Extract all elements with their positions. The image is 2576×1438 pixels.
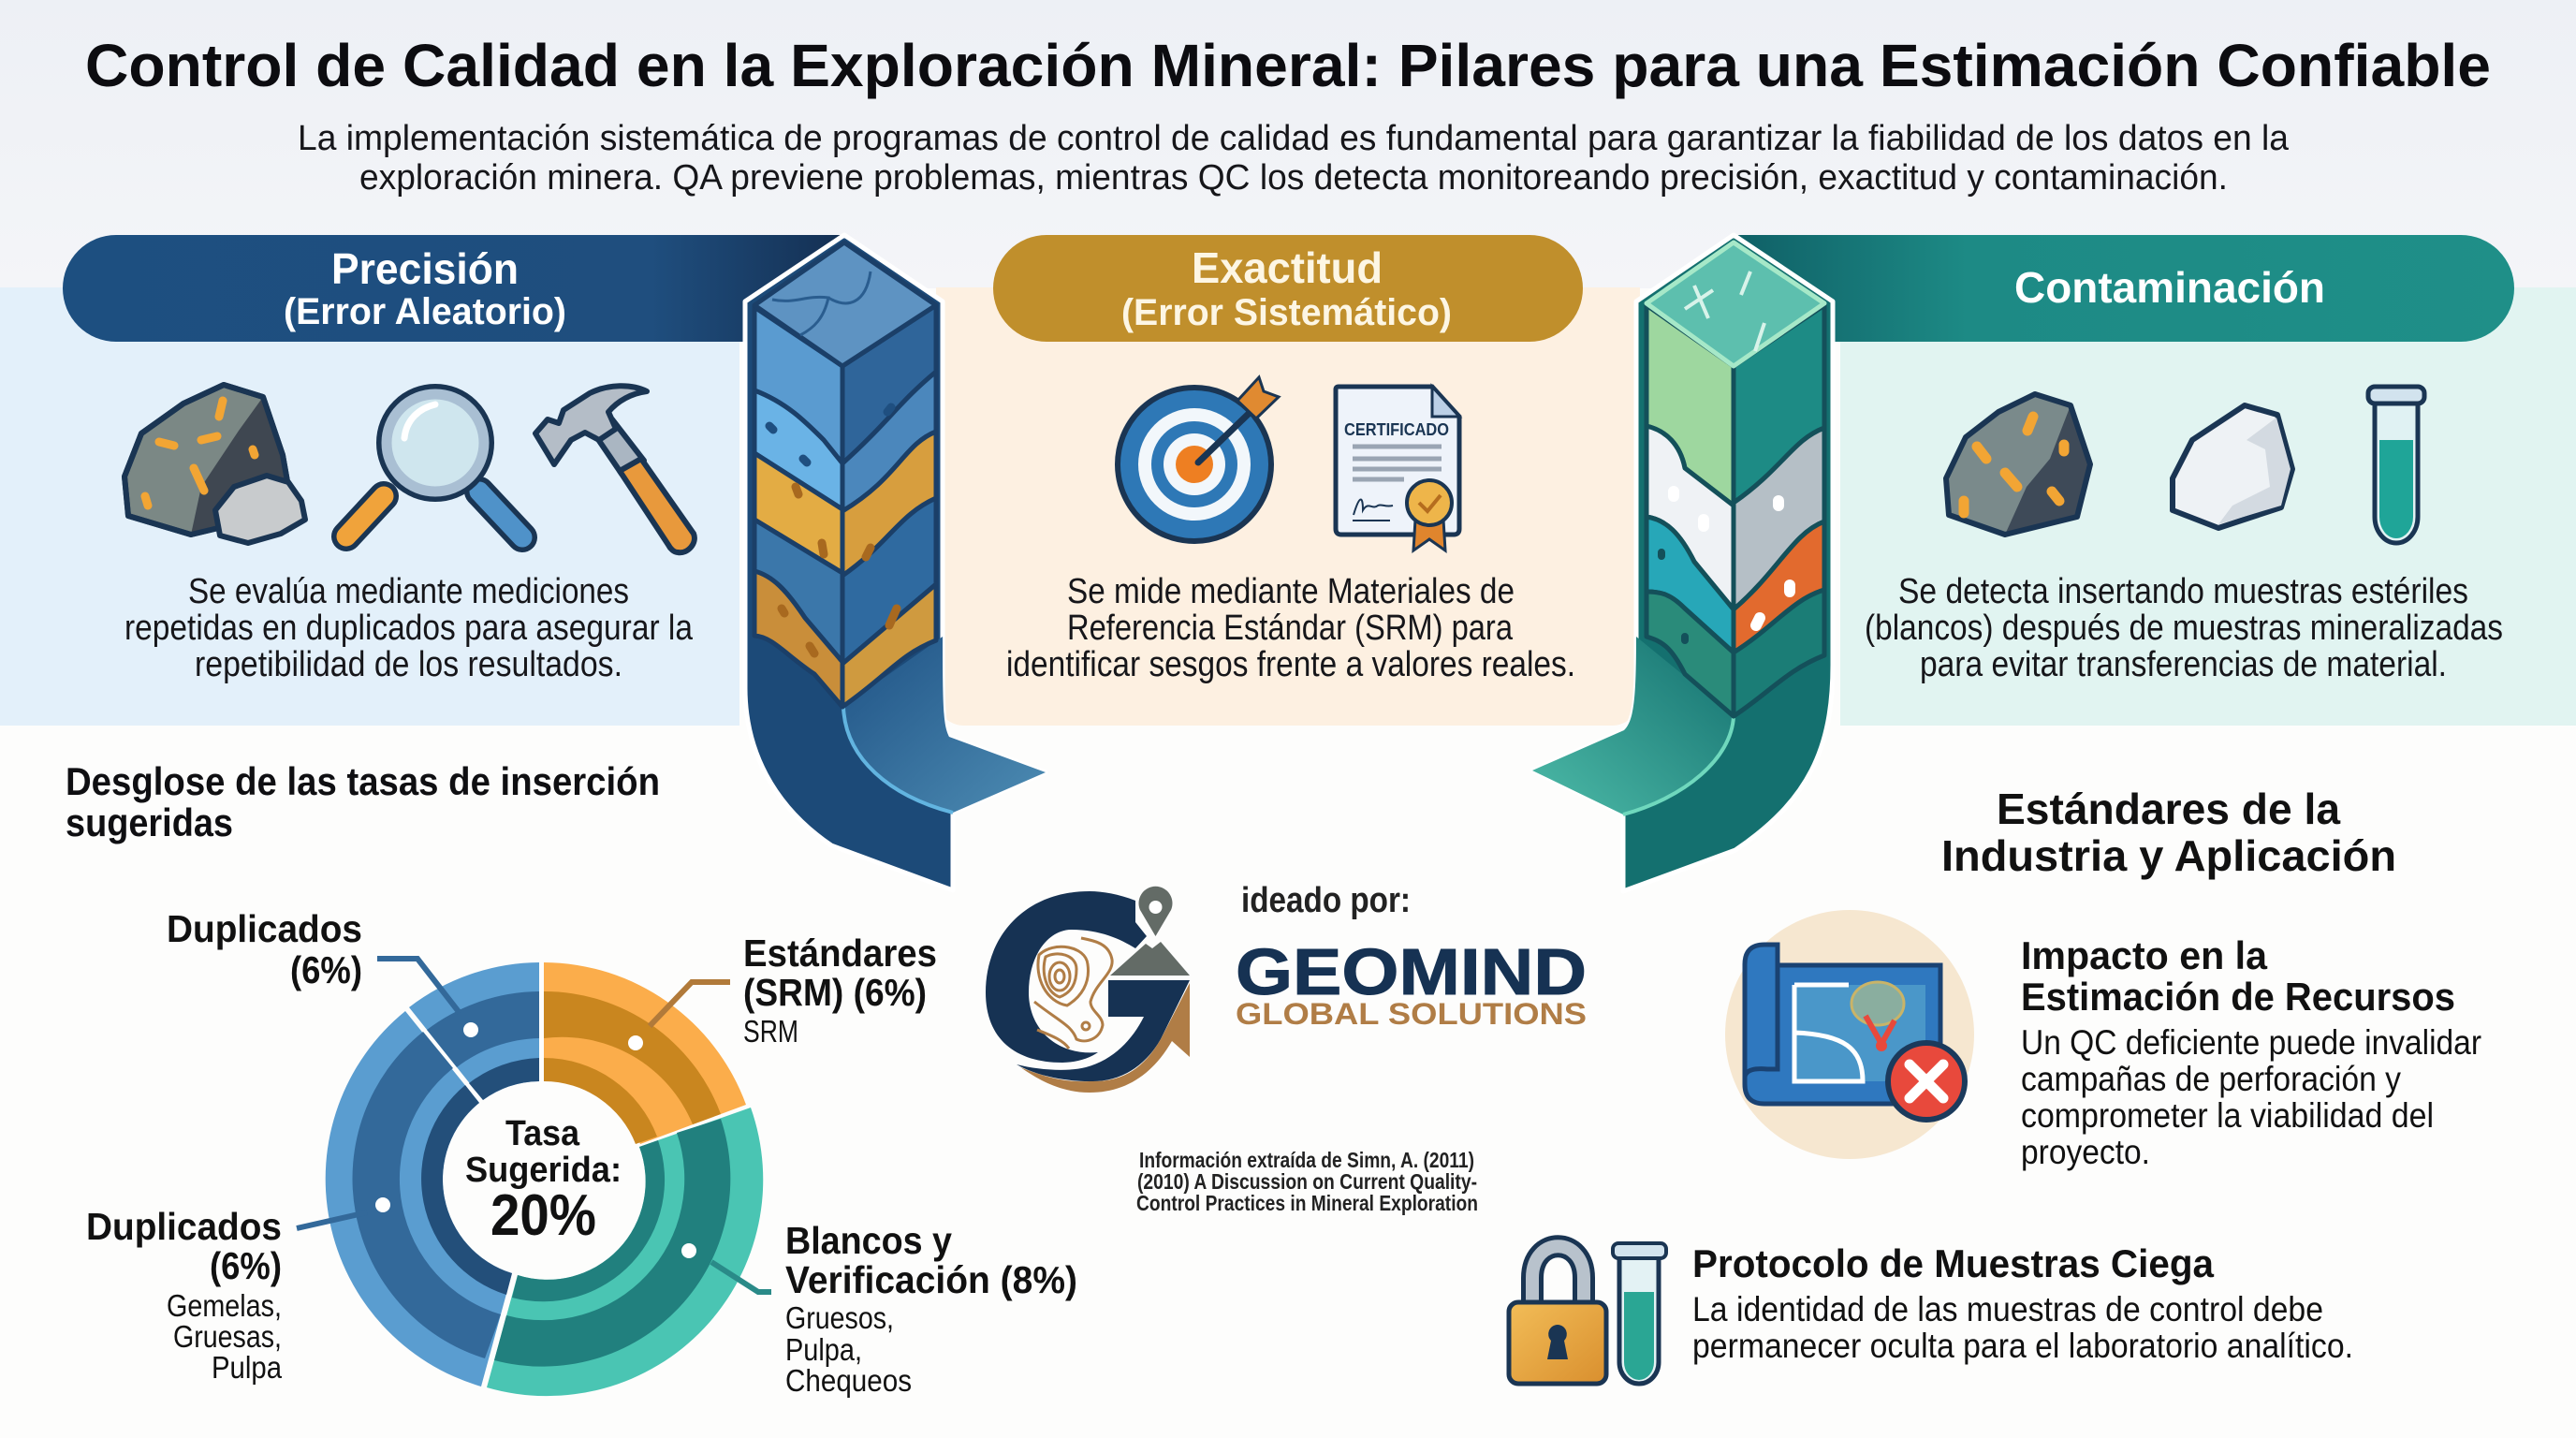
icon: hammer <box>535 386 695 552</box>
text: contaminación: para evitar transferencias de material. <box>1920 645 2447 684</box>
icon: target <box>1118 377 1279 541</box>
label: duplicados inferior: Pulpa <box>212 1350 283 1385</box>
header: exactitud: (Error Sistemático) <box>1121 292 1452 333</box>
text: protocolo: Protocolo de Muestras Ciega <box>1692 1241 2215 1285</box>
icon: certificate: CERTIFICADO <box>1344 420 1449 439</box>
pillar: teal strata column <box>1532 235 1833 891</box>
icon: magnifier <box>346 387 522 537</box>
label: blancos y verificación: Gruesos, <box>785 1300 894 1335</box>
label: blancos y verificación: Blancos y <box>785 1219 952 1262</box>
segment: duplicados inferior <box>326 1011 512 1387</box>
label: estándares: (SRM) (6%) <box>743 971 927 1014</box>
label: duplicados inferior: Gemelas, <box>167 1288 282 1323</box>
text: exactitud: identificar sesgos frente a valores reales. <box>1006 645 1575 684</box>
logo: geomind emblem <box>986 887 1190 1093</box>
text: impacto <box>2021 933 2481 1171</box>
dots <box>375 1022 696 1258</box>
leader lines <box>297 959 771 1292</box>
label: duplicados superior: (6%) <box>290 948 362 991</box>
center label: 20% <box>490 1183 596 1248</box>
label: duplicados superior <box>167 907 362 991</box>
label: duplicados inferior <box>86 1205 283 1385</box>
heading: estándares de la industria <box>1941 785 2396 880</box>
text: impacto: Estimación de Recursos <box>2021 975 2455 1019</box>
text: exactitud: Se mide mediante Materiales de <box>1067 572 1515 611</box>
citation: Información extraída de Simn, A. (2011) <box>1139 1148 1474 1172</box>
intro text: La implementación sistemática de programas de control de calidad es fundamental para garantizar la fiabilidad de los datos en la <box>298 119 2290 158</box>
label: estándares: SRM <box>743 1014 798 1049</box>
text: exactitud <box>1006 572 1575 684</box>
heading: desglose: Desglose de las tasas de inserción <box>66 759 660 803</box>
header: precisión: (Error Aleatorio) <box>284 291 566 332</box>
icon: map with error <box>1725 910 1974 1159</box>
header: contaminación: Contaminación <box>2014 263 2325 312</box>
heading: desglose: sugeridas <box>66 800 233 844</box>
panel: precisión <box>0 235 847 726</box>
label: duplicados inferior: Duplicados <box>86 1205 282 1248</box>
text: precisión: repetidas en duplicados para asegurar la <box>124 609 694 648</box>
text: precisión: repetibilidad de los resultados. <box>195 645 622 684</box>
center label <box>465 1114 622 1248</box>
label: blancos y verificación: Pulpa, <box>785 1332 862 1367</box>
header: exactitud: Exactitud <box>1192 243 1383 292</box>
icon: certificate <box>1336 387 1459 550</box>
text: impacto: Un QC deficiente puede invalidar <box>2021 1023 2481 1062</box>
label: duplicados inferior: (6%) <box>210 1244 282 1287</box>
header: precisión: Precisión <box>331 244 519 293</box>
center label: Sugerida: <box>465 1151 622 1190</box>
center label: Tasa <box>505 1114 580 1153</box>
icon: rocks <box>124 385 305 543</box>
text: impacto: proyecto. <box>2021 1133 2150 1171</box>
citation: (2010) A Discussion on Current Quality- <box>1137 1169 1477 1194</box>
text: protocolo: permanecer oculta para el laboratorio analítico. <box>1692 1327 2353 1365</box>
text: contaminación: Se detecta insertando muestras estériles <box>1898 572 2468 611</box>
heading: desglose <box>66 759 660 844</box>
heading: estándares de la industria: Estándares de la <box>1997 785 2340 833</box>
icon: white rock <box>2173 405 2292 528</box>
citation <box>1136 1148 1478 1215</box>
label: blancos y verificación: Chequeos <box>785 1363 912 1398</box>
segment: estándares <box>544 962 746 1144</box>
text: impacto: Impacto en la <box>2021 933 2268 977</box>
segment: blancos y verificación <box>487 1108 763 1396</box>
label: blancos y verificación: Verificación (8%) <box>785 1258 1077 1301</box>
logo: geomind wordmark: GLOBAL SOLUTIONS <box>1236 997 1587 1031</box>
panel: contaminación <box>1732 235 2576 726</box>
label: blancos y verificación <box>785 1219 1077 1398</box>
icon: ore rock <box>1946 394 2090 535</box>
text: impacto: campañas de perforación y <box>2021 1060 2401 1098</box>
title: Control de Calidad en la Exploración Mineral: Pilares para una Estimación Confiable <box>85 32 2491 99</box>
icon: test tube <box>2368 387 2424 543</box>
logo: geomind wordmark: ideado por: <box>1241 881 1411 920</box>
text: precisión <box>124 572 694 684</box>
intro text: exploración minera. QA previene problemas, mientras QC los detecta monitoreando precisión, exactitud y contaminación. <box>359 158 2228 198</box>
logo: geomind wordmark <box>1236 881 1587 1031</box>
heading: estándares de la industria: Industria y Aplicación <box>1941 831 2396 880</box>
label: estándares: Estándares <box>743 932 937 975</box>
pillar: blue strata column <box>745 235 1046 890</box>
intro text <box>298 119 2290 198</box>
label: estándares <box>743 932 937 1049</box>
header: exactitud <box>993 235 1583 342</box>
panel: exactitud <box>936 235 1640 726</box>
donut chart <box>297 959 771 1396</box>
header: precisión <box>63 235 847 342</box>
text: exactitud: Referencia Estándar (SRM) para <box>1067 609 1514 648</box>
text: protocolo: La identidad de las muestras de control debe <box>1692 1290 2323 1328</box>
text: protocolo <box>1692 1241 2353 1365</box>
label: duplicados inferior: Gruesas, <box>173 1319 282 1354</box>
text: contaminación <box>1865 572 2503 684</box>
logo: geomind wordmark: GEOMIND <box>1236 935 1587 1008</box>
text: impacto: comprometer la viabilidad del <box>2021 1096 2434 1135</box>
text: precisión: Se evalúa mediante mediciones <box>188 572 629 611</box>
header: contaminación <box>1732 235 2514 342</box>
icon: lock and tube <box>1509 1243 1666 1384</box>
citation: Control Practices in Mineral Exploration <box>1136 1191 1478 1215</box>
label: duplicados superior: Duplicados <box>167 907 362 950</box>
segment: duplicados superior <box>409 962 539 1100</box>
text: contaminación: (blancos) después de muestras mineralizadas <box>1865 609 2503 648</box>
